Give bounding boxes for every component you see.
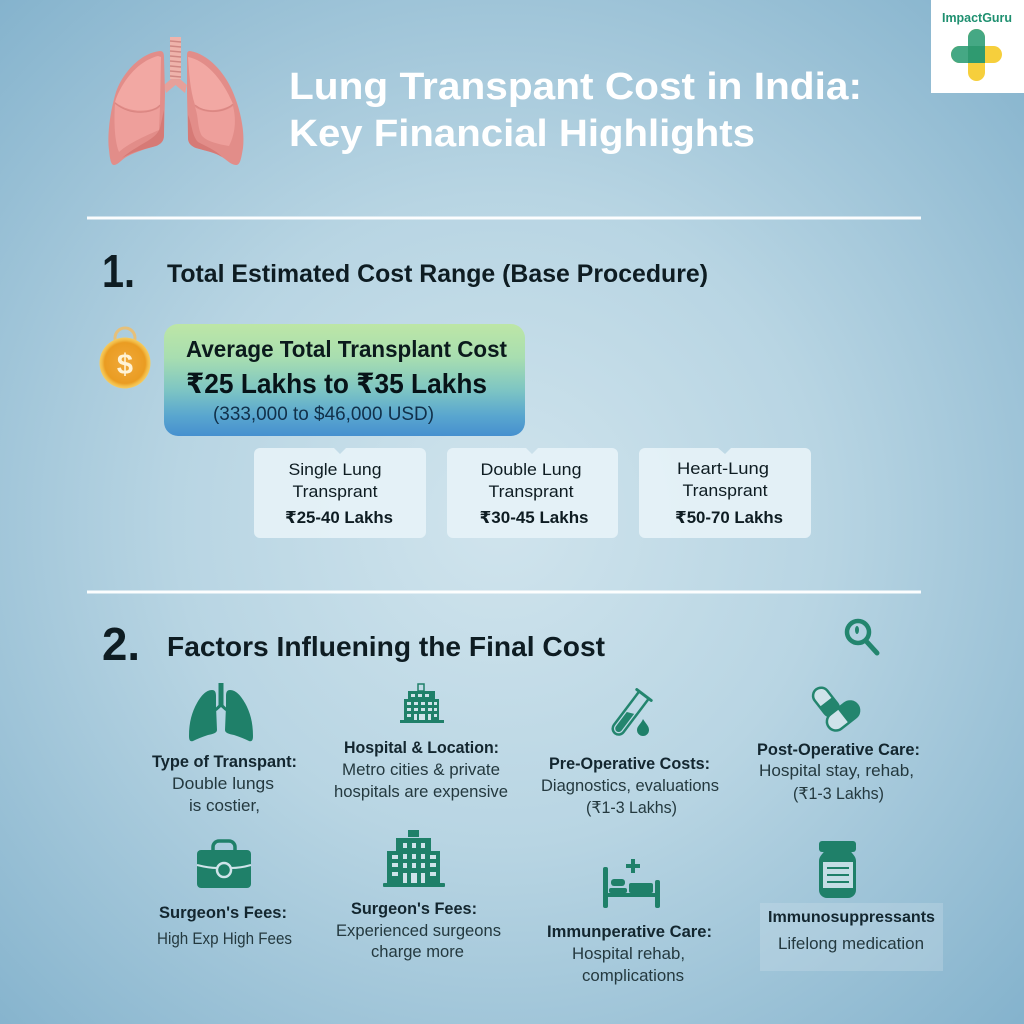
- icon: hospital building: [400, 684, 444, 723]
- card: single lung: ₹25-40 Lakhs: [285, 509, 393, 527]
- icon: green lungs: [189, 683, 253, 741]
- icon: dollar coin: [100, 328, 150, 388]
- icon: pink lungs: [108, 37, 243, 165]
- card: heart-lung: Transprant: [682, 481, 768, 500]
- section 1 heading: [102, 245, 708, 297]
- factor: surgeon's fees, building: [336, 830, 501, 961]
- factor: immunosuppressants: Lifelong medication: [778, 935, 924, 953]
- title: [289, 66, 862, 155]
- card: single lung: [254, 448, 426, 538]
- card: single lung: Transprant: [292, 482, 378, 501]
- factor: surgeon's fees, briefcase: [157, 841, 292, 948]
- card: double lung: [447, 448, 618, 538]
- factor: hospital and location: hospitals are expensive: [334, 783, 508, 801]
- factor: type of transplant: is costier,: [189, 797, 260, 815]
- logo: ImpactGuru: ImpactGuru: [942, 11, 1012, 25]
- factor: surgeon's fees, briefcase: High Exp High Fees: [157, 930, 292, 948]
- section 1 heading: Total Estimated Cost Range (Base Procedure): [167, 260, 708, 288]
- factor: hospital and location: [334, 684, 508, 801]
- title: Lung Transpant Cost in India:: [289, 66, 862, 108]
- factor: immunperative care: Hospital rehab,: [572, 945, 685, 963]
- section 2 heading: 2.: [102, 618, 140, 670]
- section 2 heading: Factors Influening the Final Cost: [167, 631, 605, 662]
- icon: briefcase: [197, 841, 251, 888]
- factor: type of transplant: Double lungs: [172, 775, 274, 793]
- factor: pre-operative costs: (₹1-3 Lakhs): [586, 799, 677, 817]
- icon: test tube: [608, 690, 651, 739]
- card: single lung: Single Lung: [288, 460, 382, 479]
- panel: average total transplant cost: (333,000 to $46,000 USD): [213, 404, 434, 425]
- panel: average total transplant cost: ₹25 Lakhs to ₹35 Lakhs: [186, 368, 487, 399]
- factor: pre-operative costs: Diagnostics, evaluations: [541, 777, 719, 795]
- icon: capsules: [810, 684, 863, 734]
- panel: average total transplant cost: Average Total Transplant Cost: [186, 336, 507, 362]
- card: double lung: ₹30-45 Lakhs: [480, 509, 588, 527]
- factor: type of transplant: [152, 683, 297, 815]
- section 1 heading: 1.: [102, 245, 135, 297]
- factor: immunosuppressants: [760, 841, 943, 971]
- factor: surgeon's fees, building: charge more: [371, 943, 464, 961]
- factor: type of transplant: Type of Transpant:: [152, 753, 297, 771]
- icon: dollar coin: $: [117, 349, 133, 381]
- factor: immunperative care: Immunperative Care:: [547, 923, 712, 941]
- panel: average total transplant cost: [164, 324, 525, 436]
- icon: large hospital building: [383, 830, 445, 887]
- factor: surgeon's fees, building: Experienced surgeons: [336, 922, 501, 940]
- card: heart-lung: ₹50-70 Lakhs: [675, 509, 783, 527]
- card: double lung: Transprant: [488, 482, 574, 501]
- factor: immunperative care: complications: [582, 967, 684, 985]
- factor: post-operative care: [757, 684, 920, 803]
- icon: magnifier: [847, 621, 877, 653]
- card: heart-lung: Heart-Lung: [677, 459, 769, 478]
- logo: ImpactGuru: [931, 0, 1024, 93]
- factor: post-operative care: Post-Operative Care:: [757, 741, 920, 759]
- icon: medicine bottle: [819, 841, 856, 898]
- title: Key Financial Highlights: [289, 113, 755, 155]
- factor: pre-operative costs: [541, 690, 719, 817]
- icon: hospital bed: [603, 859, 660, 908]
- factor: hospital and location: Metro cities & private: [342, 761, 500, 779]
- factor: hospital and location: Hospital & Location:: [344, 739, 499, 757]
- factor: immunosuppressants: Immunosuppressants: [768, 909, 935, 926]
- card: heart-lung: [639, 448, 811, 538]
- factor: post-operative care: (₹1-3 Lakhs): [793, 785, 884, 803]
- factor: immunperative care: [547, 859, 712, 985]
- factor: surgeon's fees, building: Surgeon's Fees:: [351, 900, 477, 918]
- factor: post-operative care: Hospital stay, rehab,: [759, 762, 914, 780]
- factor: pre-operative costs: Pre-Operative Costs:: [549, 755, 710, 773]
- section 2 heading: [102, 618, 605, 670]
- factor: surgeon's fees, briefcase: Surgeon's Fees:: [159, 904, 287, 922]
- card: double lung: Double Lung: [480, 460, 582, 479]
